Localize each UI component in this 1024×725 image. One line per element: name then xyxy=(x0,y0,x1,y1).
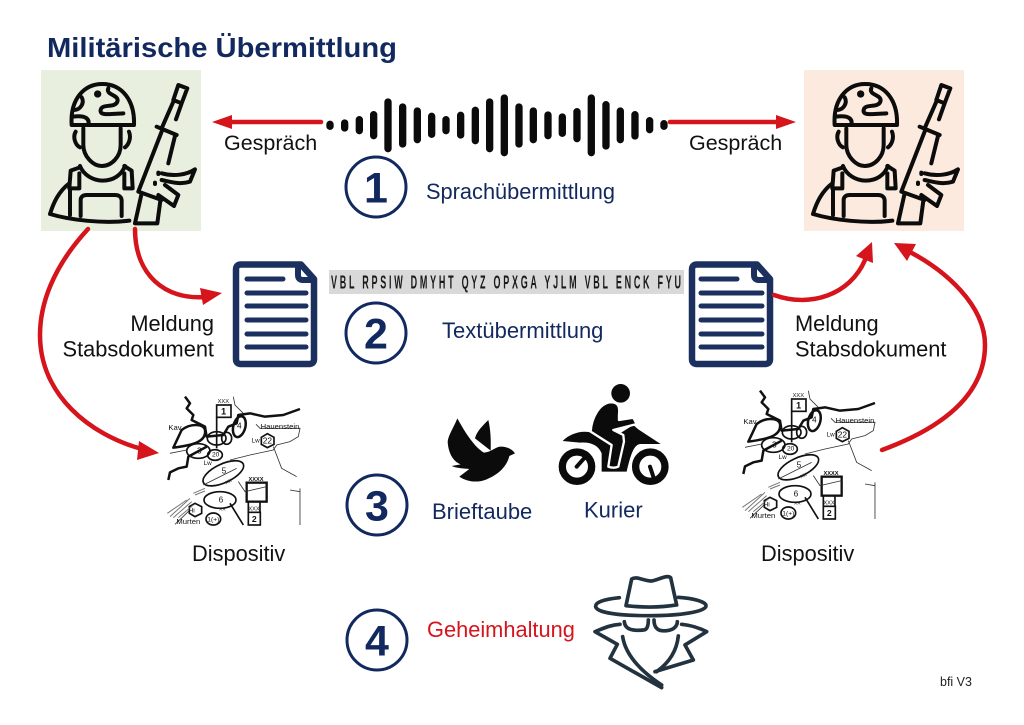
icon: left soldier with rifle xyxy=(50,84,195,223)
map: left dispositiv: XXX xyxy=(248,506,260,512)
number badge 2 xyxy=(346,303,406,363)
map: right dispositiv: 4 xyxy=(812,414,817,424)
cipher text strip: VBL RPSIW DMYHT QYZ OPXGA YJLM VBL ENCK FYU xyxy=(331,273,681,294)
map: left dispositiv xyxy=(167,397,300,526)
icon: left document xyxy=(236,264,314,364)
heading: Sprachübermittlung: Sprachübermittlung xyxy=(426,179,615,204)
map: right dispositiv: 22 xyxy=(838,430,847,440)
icon: right document xyxy=(692,264,770,364)
arrow: document to right soldier xyxy=(774,242,873,300)
map: left dispositiv: 6 xyxy=(219,494,224,504)
label: Dispositiv right: Dispositiv xyxy=(761,541,854,566)
map: right dispositiv: XX xyxy=(799,472,808,480)
map: right dispositiv: Kav xyxy=(743,417,757,426)
number badge 2: 2 xyxy=(364,310,388,358)
label: Meldung Stabsdokument right: Meldung xyxy=(795,311,879,336)
label: Kurier: Kurier xyxy=(584,498,643,522)
version note: bfi V3 xyxy=(940,675,972,689)
number badge 3 xyxy=(347,475,407,535)
label: Meldung Stabsdokument right: Stabsdokument xyxy=(795,336,946,362)
map: left dispositiv: Murten xyxy=(176,517,200,526)
map: left dispositiv: XXXX xyxy=(248,477,264,483)
label: Meldung Stabsdokument left: Meldung xyxy=(130,311,214,336)
arrow: left soldier to dispositiv xyxy=(40,229,159,460)
map: right dispositiv: Lw xyxy=(827,432,835,439)
icon: voice waveform xyxy=(330,98,664,153)
map: left dispositiv: Lw xyxy=(204,460,212,467)
heading: Geheimhaltung: Geheimhaltung xyxy=(427,617,575,642)
map: left dispositiv: 20 xyxy=(212,452,220,459)
number badge 3: 3 xyxy=(365,482,389,530)
icon: right soldier with rifle xyxy=(813,84,958,223)
map: right dispositiv: 20 xyxy=(787,446,795,453)
map: right dispositiv: 3 xyxy=(772,439,777,449)
map: left dispositiv: 1 xyxy=(221,406,226,416)
map: right dispositiv: Murten xyxy=(751,511,775,520)
map: right dispositiv: 1 xyxy=(796,400,801,410)
map: left dispositiv: XX xyxy=(219,506,226,512)
map: right dispositiv: 6 xyxy=(794,488,799,498)
map: right dispositiv: Lw xyxy=(779,454,787,461)
map: right dispositiv: XXXX xyxy=(823,471,839,477)
arrow: speech to left soldier xyxy=(212,115,321,129)
map: left dispositiv: Hi xyxy=(189,507,195,514)
map: left dispositiv: 1(+) xyxy=(207,516,219,523)
number badge 1: 1 xyxy=(364,164,388,212)
number badge 4: 4 xyxy=(365,618,389,666)
map: left dispositiv: 2 xyxy=(252,514,257,524)
map: left dispositiv: Lw xyxy=(252,438,260,445)
map: right dispositiv: XXX xyxy=(793,393,804,399)
map: right dispositiv: 2 xyxy=(827,508,832,518)
label: Dispositiv left: Dispositiv xyxy=(192,541,285,566)
map: right dispositiv: Hi xyxy=(764,501,770,508)
map: left dispositiv: 4 xyxy=(237,420,242,430)
arrow: speech to right soldier xyxy=(670,115,796,129)
map: left dispositiv: 3 xyxy=(197,445,202,455)
heading: Textübermittlung: Textübermittlung xyxy=(442,318,603,343)
label: Gespräch left: Gespräch xyxy=(224,131,317,155)
title: Militärische Übermittlung xyxy=(47,32,397,63)
icon: carrier pigeon xyxy=(448,418,515,482)
number badge 1 xyxy=(346,157,406,217)
panel: right soldier xyxy=(804,70,964,231)
label: Meldung Stabsdokument left: Stabsdokument xyxy=(63,336,214,362)
label: Gespräch right: Gespräch xyxy=(689,131,782,155)
map: right dispositiv: XX xyxy=(794,500,801,506)
map: left dispositiv: 22 xyxy=(263,436,272,446)
panel: left soldier xyxy=(41,70,201,231)
map: right dispositiv: Hauenstein xyxy=(836,416,874,425)
map: left dispositiv: Kav xyxy=(168,423,182,432)
map: left dispositiv: Hauenstein xyxy=(261,422,299,431)
arrow: left soldier to document xyxy=(135,229,222,305)
arrow: dispositiv to right soldier xyxy=(882,243,985,450)
icon: spy with hat xyxy=(595,577,707,688)
map: right dispositiv xyxy=(742,391,875,520)
number badge 4 xyxy=(347,610,407,670)
map: right dispositiv: XXX xyxy=(823,500,835,506)
map: right dispositiv: 1(+) xyxy=(782,510,794,517)
map: left dispositiv: XXX xyxy=(218,399,229,405)
map: left dispositiv: XX xyxy=(224,478,233,486)
map: left dispositiv: 5 xyxy=(222,465,227,475)
icon: motorcycle courier xyxy=(562,384,665,481)
label: Brieftaube: Brieftaube xyxy=(432,499,532,524)
map: right dispositiv: 5 xyxy=(797,459,802,469)
